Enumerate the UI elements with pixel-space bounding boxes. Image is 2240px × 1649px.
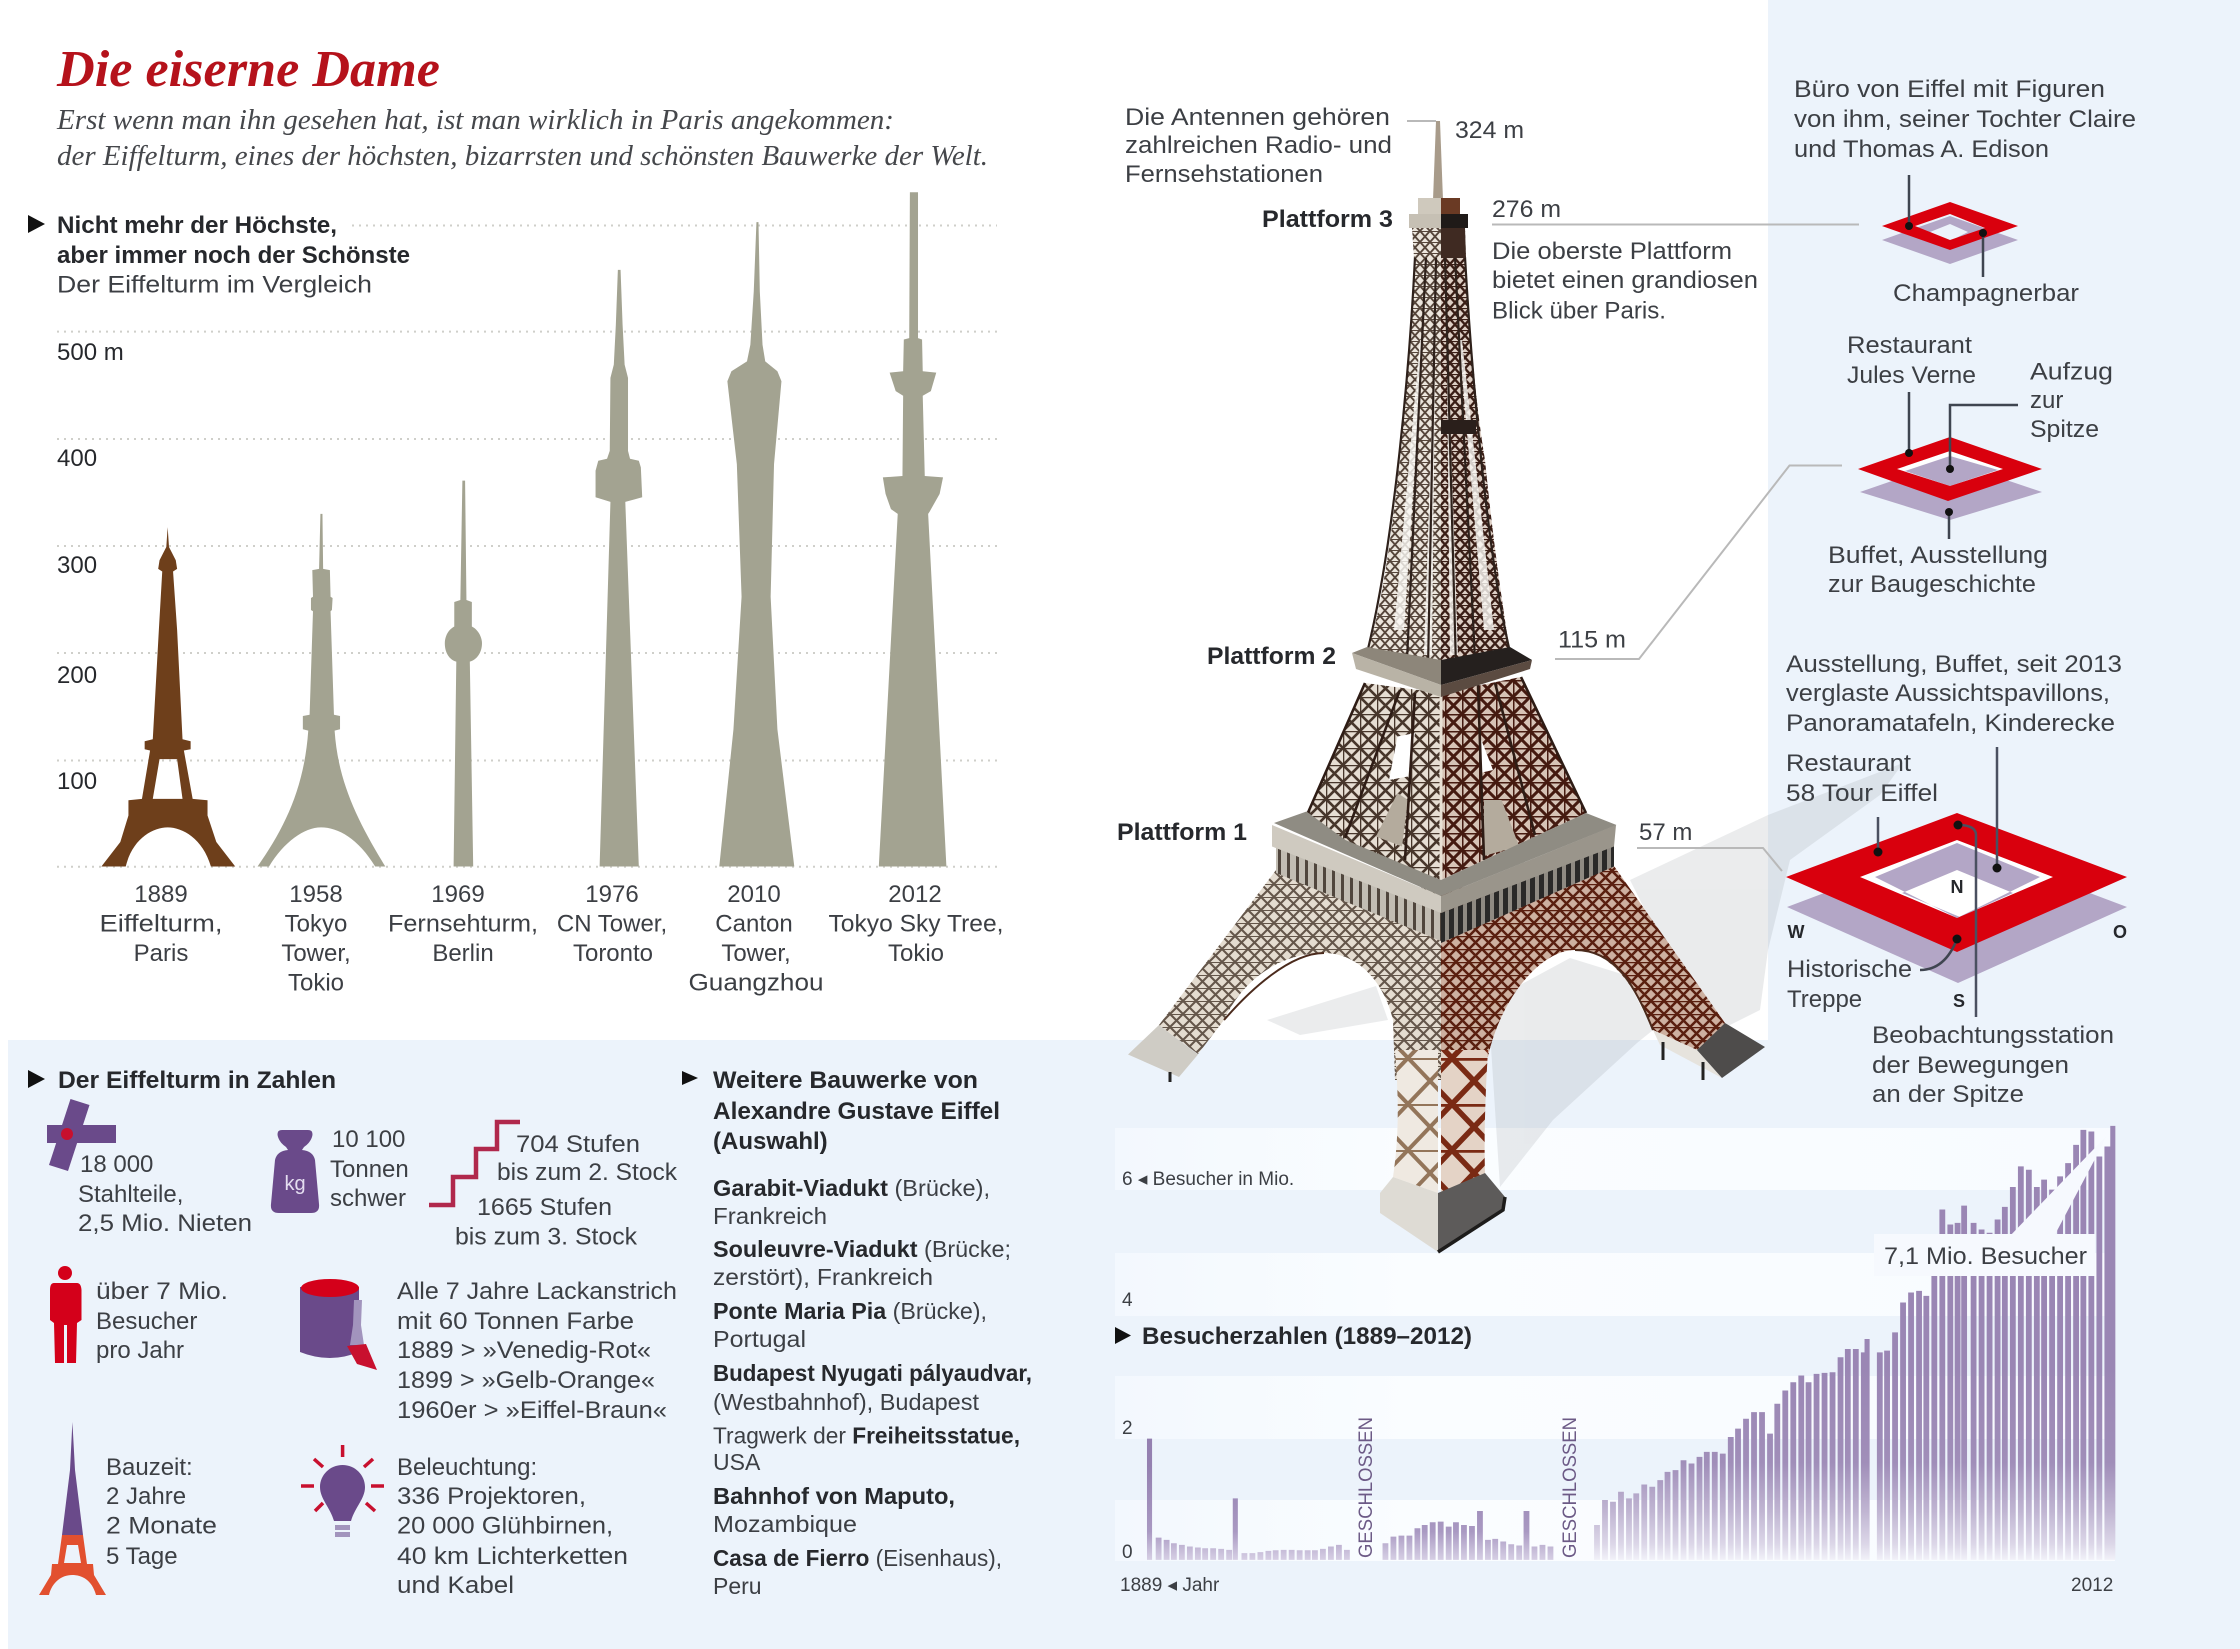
other works list xyxy=(682,1067,1032,1599)
list heading: Alexandre Gustave Eiffel xyxy=(713,1098,1000,1125)
plan callouts: Aufzug xyxy=(2030,358,2113,386)
annotation: 276 m xyxy=(1492,196,1859,324)
plan: red ring xyxy=(1858,437,2042,501)
text: steel parts: Stahlteile, xyxy=(78,1181,183,1208)
plan: purple floor xyxy=(1860,461,2042,520)
tower labels: Tokio xyxy=(288,970,344,996)
tower labels: 1958 xyxy=(289,881,343,908)
plan callouts: Spitze xyxy=(2030,416,2099,443)
silhouette: Tokyo Tower xyxy=(258,514,385,867)
list entries: Souleuvre-Viadukt (Brücke; xyxy=(713,1236,1011,1262)
upper section xyxy=(1367,198,1510,677)
list entries: Peru xyxy=(713,1573,762,1599)
plan callouts: an der Spitze xyxy=(1872,1081,2024,1108)
visitor bars xyxy=(1147,1126,2115,1560)
list entries: (Westbahnhof), Budapest xyxy=(713,1389,980,1415)
text: lighting: 336 Projektoren, xyxy=(397,1483,586,1510)
text: visitors: über 7 Mio. xyxy=(96,1278,228,1305)
platform 1 xyxy=(1272,812,1616,943)
text: visitors xyxy=(96,1278,228,1364)
chart axis labels: 2012 xyxy=(2071,1575,2113,1596)
text: stairs: 1665 Stufen xyxy=(477,1194,612,1221)
tower labels: Canton xyxy=(715,910,793,938)
tower labels: 2010 xyxy=(727,881,781,908)
icon: steel parts xyxy=(47,1099,116,1171)
y axis labels: 200 xyxy=(57,662,97,689)
chart axis labels: 4 xyxy=(1122,1290,1133,1311)
text: weight: 10 100 xyxy=(332,1126,405,1153)
annotation: 276 m: Die oberste Plattform xyxy=(1492,238,1732,265)
visitor chart xyxy=(1115,1126,2115,1596)
plan callouts: Ausstellung, Buffet, seit 2013 xyxy=(1786,651,2122,678)
plan: compass: S xyxy=(1953,991,1965,1011)
annotation: 276 m: 276 m xyxy=(1492,196,1561,223)
tower labels: 1976 xyxy=(585,881,639,908)
annotation: antenna xyxy=(1125,104,1436,188)
chart axis labels: 0 xyxy=(1122,1542,1133,1563)
height comparison chart xyxy=(28,192,1004,996)
icon: weight xyxy=(271,1130,319,1213)
plan callouts: Büro von Eiffel mit Figuren xyxy=(1794,76,2105,103)
annotation: antenna: Die Antennen gehören xyxy=(1125,104,1390,131)
callout: visitors xyxy=(1874,1234,2095,1276)
annotation: platform 1: Plattform 1 xyxy=(1117,819,1247,846)
icon: stairs xyxy=(429,1122,520,1205)
tower labels: Fernsehturm, xyxy=(388,910,538,938)
plan callouts: Restaurant xyxy=(1847,332,1972,359)
icon: small tower xyxy=(39,1422,106,1595)
list heading: (Auswahl) xyxy=(713,1128,828,1155)
text: visitors: pro Jahr xyxy=(96,1337,184,1364)
plan: compass: O xyxy=(2113,922,2127,942)
middle section xyxy=(1306,677,1586,886)
chart axis labels: 6 ◂ Besucher in Mio. xyxy=(1122,1169,1294,1190)
annotation: 324 m: 324 m xyxy=(1455,117,1524,144)
plan callouts: Beobachtungsstation xyxy=(1872,1022,2114,1049)
plan: inner void xyxy=(1860,840,2053,918)
text: steel parts xyxy=(78,1151,252,1237)
numbers heading: Der Eiffelturm in Zahlen xyxy=(58,1067,336,1094)
tower labels: 1889 xyxy=(134,881,188,908)
chart heading: aber immer noch der Schönste xyxy=(57,242,410,269)
annotation: platform 3: Plattform 3 xyxy=(1262,206,1393,233)
list entries: Ponte Maria Pia (Brücke), xyxy=(713,1298,987,1324)
plan: purple floor xyxy=(1787,843,2127,983)
chart heading: Der Eiffelturm im Vergleich xyxy=(57,272,372,298)
tower labels xyxy=(100,881,1004,996)
plan: compass: N xyxy=(1950,877,1964,897)
text: build time: Bauzeit: xyxy=(106,1454,193,1481)
subtitle: Erst wenn man ihn gesehen hat, ist man wirklich in Paris angekommen: xyxy=(56,104,894,136)
tower labels: 1969 xyxy=(431,881,485,908)
y axis labels: 300 xyxy=(57,552,97,579)
plan callouts: Champagnerbar xyxy=(1893,280,2079,307)
numbers section xyxy=(28,1067,678,1599)
plan: inner floor xyxy=(1875,843,2040,918)
list heading xyxy=(682,1067,1000,1155)
plan callouts: der Bewegungen xyxy=(1872,1052,2069,1079)
text: build time xyxy=(106,1454,217,1570)
text: lighting: 40 km Lichterketten xyxy=(397,1543,628,1570)
tower labels: Toronto xyxy=(573,940,653,967)
annotation: 276 m: bietet einen grandiosen xyxy=(1492,267,1758,294)
tower labels: Guangzhou xyxy=(688,970,824,996)
list entries: Portugal xyxy=(713,1326,806,1352)
icon: weight: kg xyxy=(284,1173,306,1195)
plan: red ring xyxy=(1786,813,2127,952)
plan callouts: 58 Tour Eiffel xyxy=(1786,780,1938,807)
text: paint xyxy=(397,1278,677,1424)
platform 3 plan xyxy=(1794,76,2136,307)
y axis labels xyxy=(57,339,124,795)
platform 2 xyxy=(1352,647,1532,697)
text: paint: Alle 7 Jahre Lackanstrich xyxy=(397,1278,677,1305)
chart axis labels: 1889 ◂ Jahr xyxy=(1120,1575,1220,1596)
plan: inner void xyxy=(1897,451,2003,486)
tower labels: Tokyo Sky Tree, xyxy=(828,910,1004,938)
silhouette: Canton Tower xyxy=(719,222,794,867)
text: stairs: 704 Stufen xyxy=(516,1131,640,1158)
background panel: right column xyxy=(1768,0,2240,1649)
annotation: antenna: Fernsehstationen xyxy=(1125,161,1323,188)
text: steel parts: 2,5 Mio. Nieten xyxy=(78,1210,252,1237)
text: stairs: bis zum 2. Stock xyxy=(497,1159,678,1186)
list entries: Bahnhof von Maputo, xyxy=(713,1483,955,1509)
chart heading xyxy=(28,212,410,298)
text: paint: mit 60 Tonnen Farbe xyxy=(397,1308,634,1335)
plan callouts: Historische xyxy=(1787,956,1912,983)
background panel: lower band xyxy=(8,1040,2240,1649)
text: build time: 2 Jahre xyxy=(106,1483,186,1510)
subtitle xyxy=(56,104,988,172)
text: lighting: Beleuchtung: xyxy=(397,1454,537,1481)
y axis labels: 400 xyxy=(57,445,97,472)
text: paint: 1899 > »Gelb-Orange« xyxy=(397,1367,655,1394)
plan callouts xyxy=(1786,651,2122,1108)
text: build time: 5 Tage xyxy=(106,1543,178,1570)
tower shadows xyxy=(1267,763,1903,1187)
plan: compass xyxy=(1788,877,2127,1011)
plan callouts: Buffet, Ausstellung xyxy=(1828,542,2048,569)
tower labels: Tokio xyxy=(888,940,944,967)
closed label 2: GESCHLOSSEN xyxy=(1560,1417,1581,1558)
plan: red ring xyxy=(1882,202,2018,250)
Eiffel Tower illustration xyxy=(1128,121,1765,1252)
annotation: 57 m xyxy=(1637,819,1782,871)
tower silhouettes xyxy=(101,192,946,867)
chart axis labels: 2 xyxy=(1122,1418,1133,1439)
tower feet xyxy=(1128,1023,1765,1252)
plan callouts: zur xyxy=(2030,387,2063,414)
tower labels: Paris xyxy=(134,940,188,967)
tower annotations xyxy=(1117,104,1859,871)
plan callouts: von ihm, seiner Tochter Claire xyxy=(1794,106,2136,133)
text: steel parts: 18 000 xyxy=(80,1151,153,1178)
platform 1 plan xyxy=(1786,651,2127,1108)
list entries: Mozambique xyxy=(713,1511,857,1537)
icon: light bulb xyxy=(301,1445,384,1537)
lower legs xyxy=(1159,866,1725,1193)
list entries: USA xyxy=(713,1449,761,1475)
antenna xyxy=(1433,121,1443,200)
plan callouts: zur Baugeschichte xyxy=(1828,571,2036,598)
chart axis labels xyxy=(1120,1169,2113,1596)
plan: inner floor xyxy=(1905,456,1998,486)
list entries: Casa de Fierro (Eisenhaus), xyxy=(713,1545,1002,1571)
list entries: Budapest Nyugati pályaudvar, xyxy=(713,1360,1032,1386)
title: Die eiserne Dame xyxy=(56,41,440,98)
text: weight: schwer xyxy=(330,1185,406,1212)
tower labels: Eiffelturm, xyxy=(100,910,222,938)
closed label 1: GESCHLOSSEN xyxy=(1356,1417,1377,1558)
annotation: 115 m: 115 m xyxy=(1558,626,1626,654)
plan callouts: Jules Verne xyxy=(1847,362,1976,389)
chart heading: Nicht mehr der Höchste, xyxy=(57,212,337,239)
chart heading: Besucherzahlen (1889–2012) xyxy=(1142,1323,1472,1350)
plan callouts xyxy=(1794,76,2136,307)
plan: purple floor xyxy=(1882,216,2018,264)
list entries: Frankreich xyxy=(713,1203,827,1229)
text: lighting: und Kabel xyxy=(397,1572,514,1599)
annotation: 276 m: Blick über Paris. xyxy=(1492,298,1666,324)
plan callouts: Treppe xyxy=(1787,986,1862,1013)
plan: compass: W xyxy=(1788,922,1804,942)
text: stairs: bis zum 3. Stock xyxy=(455,1224,638,1250)
tower labels: Tokyo xyxy=(285,910,347,938)
text: paint: 1889 > »Venedig-Rot« xyxy=(397,1337,651,1364)
plan callouts: Restaurant xyxy=(1786,750,1911,777)
y axis labels: 500 m xyxy=(57,339,124,366)
silhouette: Eiffelturm xyxy=(101,527,235,867)
plan callouts: Panoramatafeln, Kinderecke xyxy=(1786,710,2115,737)
silhouette: Fernsehturm xyxy=(445,481,482,867)
icon: paint can xyxy=(300,1279,377,1370)
list entries xyxy=(713,1175,1032,1599)
list heading: Weitere Bauwerke von xyxy=(713,1067,978,1094)
list entries: zerstört), Frankreich xyxy=(713,1264,933,1290)
plan callouts xyxy=(1828,332,2113,598)
icon: visitor xyxy=(50,1266,82,1363)
callout: visitors: 7,1 Mio. Besucher xyxy=(1884,1243,2087,1270)
subtitle: der Eiffelturm, eines der höchsten, bizarrsten und schönsten Bauwerke der Welt. xyxy=(57,140,988,172)
text: lighting xyxy=(397,1454,628,1599)
list entries: Garabit-Viadukt (Brücke), xyxy=(713,1175,990,1201)
y axis labels: 100 xyxy=(57,768,97,795)
annotation: platform 2: Plattform 2 xyxy=(1207,643,1336,670)
annotation: 57 m: 57 m xyxy=(1639,819,1692,846)
text: weight xyxy=(330,1126,409,1212)
text: build time: 2 Monate xyxy=(106,1512,217,1540)
plan callouts: verglaste Aussichtspavillons, xyxy=(1786,680,2110,707)
silhouette: CN Tower xyxy=(596,270,642,867)
tower labels: 2012 xyxy=(888,881,942,908)
platform 2 plan xyxy=(1828,332,2113,598)
text: weight: Tonnen xyxy=(330,1156,409,1183)
annotation: 115 m xyxy=(1555,466,1842,659)
text: lighting: 20 000 Glühbirnen, xyxy=(397,1512,613,1540)
text: paint: 1960er > »Eiffel-Braun« xyxy=(397,1397,667,1424)
annotation: antenna: zahlreichen Radio- und xyxy=(1125,132,1392,159)
silhouette: Tokyo Sky Tree xyxy=(879,192,946,867)
tower labels: Berlin xyxy=(432,940,494,967)
text: stairs xyxy=(455,1131,678,1250)
tower labels: Tower, xyxy=(281,940,351,967)
text: visitors: Besucher xyxy=(96,1308,197,1335)
plan callouts: und Thomas A. Edison xyxy=(1794,136,2049,163)
list entries: Tragwerk der Freiheitsstatue, xyxy=(713,1422,1020,1448)
tower labels: CN Tower, xyxy=(557,910,667,938)
tower labels: Tower, xyxy=(721,940,791,967)
